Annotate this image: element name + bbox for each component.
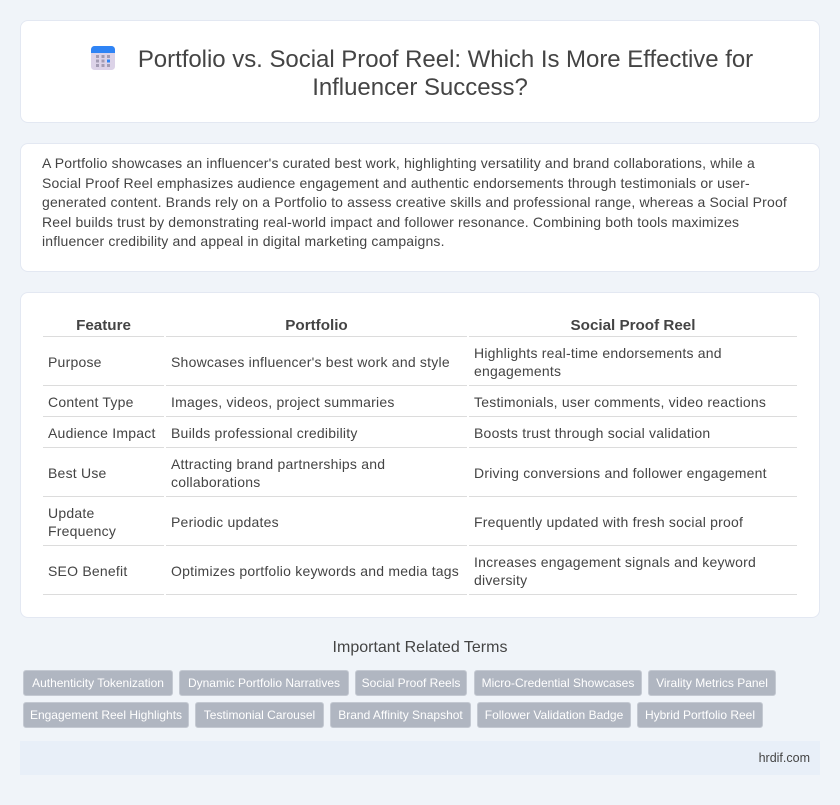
row: purpose: engagements xyxy=(474,363,561,379)
icon: calendar xyxy=(91,46,115,70)
tag: Engagement Reel Highlights xyxy=(30,708,182,722)
row: purpose: Purpose xyxy=(48,354,102,370)
panel: introduction xyxy=(20,143,820,272)
title: Influencer Success? xyxy=(312,74,528,101)
row: best use: collaborations xyxy=(171,474,260,490)
intro text xyxy=(42,155,787,249)
tag xyxy=(474,670,642,696)
heading: related terms: Important Related Terms xyxy=(333,639,507,656)
tag xyxy=(648,670,776,696)
row: purpose xyxy=(48,345,722,379)
tag xyxy=(477,702,631,728)
row: audience impact xyxy=(48,425,710,441)
row: update frequency: Frequently updated with fresh social proof xyxy=(474,514,743,530)
tag xyxy=(179,670,349,696)
intro text: A Portfolio showcases an influencer's curated best work, highlighting versatility and brand collaborations, while a xyxy=(42,155,755,171)
row: purpose: Showcases influencer's best work and style xyxy=(171,354,450,370)
footer bar xyxy=(20,741,820,775)
intro text: influencer credibility and appeal in digital marketing campaigns. xyxy=(42,233,445,249)
panel: header xyxy=(20,20,820,123)
row: best use: Driving conversions and follower engagement xyxy=(474,465,767,481)
tag xyxy=(23,702,189,728)
row: audience impact: Builds professional credibility xyxy=(171,425,358,441)
table header xyxy=(76,317,695,334)
tag xyxy=(23,670,173,696)
row: seo benefit: diversity xyxy=(474,572,527,588)
panel: comparison table xyxy=(20,292,820,618)
row: best use xyxy=(48,456,767,490)
footer source text: hrdif.com xyxy=(759,751,810,765)
row: audience impact: Audience Impact xyxy=(48,425,156,441)
title xyxy=(138,46,753,101)
row: update frequency: Periodic updates xyxy=(171,514,279,530)
row: update frequency: Update xyxy=(48,505,94,521)
tag: Authenticity Tokenization xyxy=(32,676,164,690)
row: best use: Best Use xyxy=(48,465,107,481)
table header: Feature xyxy=(76,317,131,334)
intro text: Social Proof Reel emphasizes audience engagement and authentic endorsements through testimonials or user- xyxy=(42,175,750,191)
tag: Social Proof Reels xyxy=(362,676,460,690)
tag: Follower Validation Badge xyxy=(485,708,623,722)
tag xyxy=(195,702,324,728)
tag xyxy=(330,702,471,728)
row: content type: Content Type xyxy=(48,394,134,410)
panel: related term tags xyxy=(23,670,776,728)
tag: Virality Metrics Panel xyxy=(656,676,768,690)
row: seo benefit: Increases engagement signals and keyword xyxy=(474,554,756,570)
row: seo benefit: Optimizes portfolio keywords and media tags xyxy=(171,563,459,579)
row: update frequency xyxy=(48,505,743,539)
row: content type: Images, videos, project summaries xyxy=(171,394,395,410)
tag: Testimonial Carousel xyxy=(204,708,315,722)
row: seo benefit xyxy=(48,554,756,588)
row: content type xyxy=(48,394,766,410)
row: purpose: Highlights real-time endorsements and xyxy=(474,345,722,361)
tag: Brand Affinity Snapshot xyxy=(338,708,463,722)
tag xyxy=(355,670,467,696)
tag: Micro-Credential Showcases xyxy=(482,676,634,690)
row: audience impact: Boosts trust through social validation xyxy=(474,425,710,441)
intro text: generated content. Brands rely on a Portfolio to assess creative skills and professional range, whereas a Social Proof xyxy=(42,194,787,210)
intro text: Reel builds trust by demonstrating real-world impact and follower resonance. Combining both tools maximizes xyxy=(42,214,739,230)
tag: Hybrid Portfolio Reel xyxy=(645,708,755,722)
row: update frequency: Frequency xyxy=(48,523,116,539)
table header: Social Proof Reel xyxy=(571,317,695,334)
row: best use: Attracting brand partnerships and xyxy=(171,456,385,472)
tag xyxy=(637,702,763,728)
row: content type: Testimonials, user comments, video reactions xyxy=(474,394,766,410)
row: seo benefit: SEO Benefit xyxy=(48,563,127,579)
tag: Dynamic Portfolio Narratives xyxy=(188,676,340,690)
table header: Portfolio xyxy=(285,317,348,334)
title: Portfolio vs. Social Proof Reel: Which Is More Effective for xyxy=(138,46,753,73)
